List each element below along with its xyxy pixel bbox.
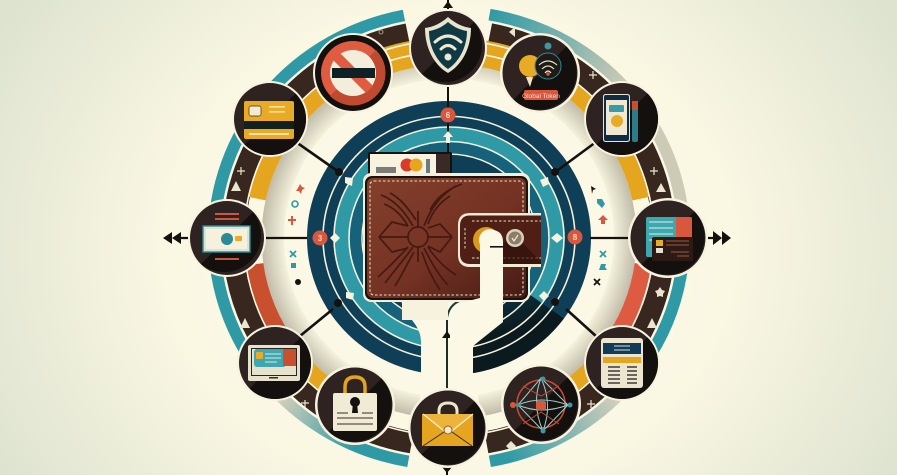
- yellow and red band: [253, 49, 645, 427]
- icon: smartphone and pen: [584, 81, 660, 157]
- icon: wireless speech bubble: [500, 33, 580, 113]
- icon: document: [584, 325, 660, 401]
- connector lines and arrows: [163, 0, 731, 475]
- icon: no sign: [313, 33, 393, 113]
- hand arm cut-out: [401, 290, 503, 400]
- numbered badges: [312, 108, 582, 246]
- icon: wireless speech bubble: Global Token: [522, 93, 560, 100]
- icon: envelope: [408, 388, 488, 468]
- cream inner ring: [295, 89, 603, 387]
- gray shadow ring: [273, 68, 625, 408]
- icon: padlock: [315, 365, 395, 445]
- numbered badges: 6: [446, 111, 451, 120]
- icon: tablet with card: [237, 325, 313, 401]
- snap button: [506, 229, 524, 247]
- wallet clasp flap: [458, 213, 541, 267]
- icon: wifi shield: [409, 9, 487, 87]
- numbered badges: 8: [573, 233, 578, 242]
- stripes beside the top and bottom icons: [255, 51, 643, 425]
- embossed wallet pattern: [378, 184, 462, 290]
- icon: two cards: [628, 198, 708, 278]
- icon: payment card: [232, 81, 308, 157]
- icon: network globe: [501, 364, 581, 444]
- numbered badges: 3: [318, 234, 323, 243]
- wallet: [363, 173, 530, 302]
- clasp ring: [473, 227, 499, 253]
- hand with finger: [450, 230, 503, 375]
- credit card behind wallet: [368, 152, 452, 178]
- white ring markers: [330, 131, 563, 301]
- teal outer ring: [214, 11, 684, 465]
- small decorative symbols: [231, 27, 666, 452]
- icon: banknote: [188, 199, 266, 277]
- brown band: [234, 31, 664, 445]
- outer ring segments: [214, 11, 684, 465]
- navy target disc: [307, 101, 591, 375]
